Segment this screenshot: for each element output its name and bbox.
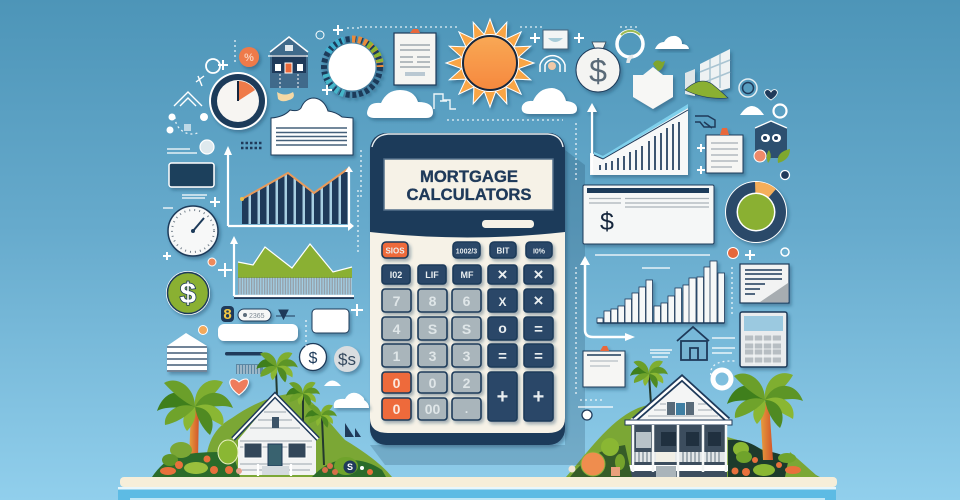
icon: dollar coin green: $ — [180, 278, 196, 310]
calculator screen — [384, 159, 553, 210]
keypad labels: 2 — [463, 375, 471, 391]
calculator bezel highlight — [372, 134, 563, 147]
icon: stacked layers house — [167, 333, 207, 372]
palm: big right — [727, 373, 803, 460]
icon: cloud top left — [367, 90, 433, 118]
keypad labels: MF — [460, 270, 474, 280]
card: dollar check — [583, 185, 714, 244]
keypad labels: 0 — [393, 375, 401, 391]
icon: money bag — [576, 42, 620, 92]
icon: colourful dial — [324, 39, 380, 95]
keypad labels: 7 — [393, 293, 401, 309]
palm: second small left — [286, 382, 320, 425]
icon: sun — [446, 19, 534, 107]
calculator screen: CALCULATORS — [406, 186, 532, 204]
keypad labels: . — [465, 402, 468, 416]
keypad labels: × — [498, 265, 508, 284]
beach and water base — [118, 477, 837, 500]
icon: triangle pin — [276, 310, 295, 319]
bushes: right of left cottage — [312, 457, 386, 477]
keypad labels — [385, 246, 546, 417]
keypad labels: × — [534, 265, 544, 284]
house: left cottage — [233, 395, 318, 476]
bushes: right hill fruit — [568, 438, 632, 477]
chart: bars with orange line — [224, 146, 354, 231]
calculator — [370, 133, 565, 445]
icon: dollar circle: $ — [309, 350, 318, 367]
icon: city building — [685, 49, 730, 98]
icon: yellow number — [221, 306, 234, 323]
palm: third small left — [305, 405, 337, 465]
keypad labels: 0 — [393, 401, 401, 417]
calculator screen: MORTGAGE — [420, 168, 518, 186]
icon: hexagon tag — [633, 60, 673, 109]
keypad labels: × — [534, 291, 544, 310]
keypad labels: = — [534, 321, 543, 338]
chart: green mountain area — [230, 236, 354, 298]
white rounded box — [312, 309, 349, 333]
icon: orange pin left 1 — [208, 258, 216, 266]
icon: clipboard right — [706, 128, 743, 173]
keypad labels: 1002/3 — [456, 248, 477, 256]
icon: small heart right — [765, 90, 777, 100]
keypad labels: = — [498, 348, 507, 365]
chart: rising area with bars — [587, 103, 688, 175]
icon: clipboard document top — [394, 29, 436, 85]
icon: orange percent circle: % — [244, 52, 254, 64]
card: dollar check: $ — [600, 208, 614, 236]
icon: money bag: $ — [589, 53, 607, 89]
keypad labels: 4 — [393, 321, 401, 337]
calculator slot — [482, 220, 534, 228]
keypad labels: S — [462, 321, 471, 337]
icon: small outlined house — [677, 327, 709, 360]
icon: dollar bag gray: $s — [338, 350, 356, 369]
keypad labels: 6 — [463, 293, 471, 309]
keypad labels: 0 — [429, 375, 437, 391]
keypad labels: I02 — [390, 270, 402, 280]
keypad — [382, 242, 553, 421]
keypad labels: LIF — [425, 270, 439, 280]
icon: cloud top right small — [655, 36, 689, 49]
icon: yellow number: 8 — [223, 306, 232, 323]
icon: ring lower right — [713, 370, 731, 388]
icon: circle badge — [739, 79, 757, 97]
calculator body — [370, 133, 565, 445]
keypad labels: SIOS — [385, 246, 405, 256]
keypad labels: 3 — [463, 348, 471, 364]
icon: orange percent circle — [239, 47, 259, 67]
hill: right green hill — [566, 405, 820, 477]
icon: navy house with eyes — [754, 121, 790, 163]
icon: text document — [740, 264, 789, 303]
icon: pie clock — [209, 72, 267, 130]
icon: cloud top right — [522, 88, 577, 114]
icon: location pin — [780, 170, 790, 180]
keypad labels: X — [498, 295, 507, 309]
keypad labels: I0% — [533, 248, 546, 256]
icon: mini calculator — [740, 312, 787, 367]
icon: small envelope — [543, 30, 568, 49]
keypad labels: o — [498, 320, 507, 336]
calculator shadow — [370, 150, 585, 465]
icon: sailboats — [345, 423, 361, 437]
white input pill — [218, 324, 298, 341]
small decorative marks — [163, 25, 789, 407]
bushes: right garden — [728, 440, 818, 477]
icon: gauge clock — [168, 206, 218, 256]
icon: heart — [230, 379, 248, 395]
bar slider — [225, 352, 263, 374]
chart: donut — [725, 181, 787, 243]
icon: orange pin left 2 — [198, 326, 208, 334]
palm: big left — [157, 380, 233, 460]
icon: orange dot right — [728, 248, 738, 258]
icon: dollar bag gray — [334, 346, 360, 372]
keypad labels: + — [533, 386, 544, 408]
icon: cloud right small — [740, 106, 764, 115]
pill with value: 2365 — [249, 313, 265, 320]
keypad labels: S — [428, 321, 437, 337]
arrow: curved axis — [580, 256, 635, 341]
keypad labels: 8 — [429, 293, 437, 309]
palm: small right — [630, 361, 668, 404]
icon: lens ring — [617, 31, 643, 63]
icon: clipboard lower right — [583, 346, 625, 387]
keypad labels: + — [497, 386, 508, 408]
icon: dollar circle — [300, 344, 326, 370]
icon: dollar coin green — [166, 271, 210, 315]
keypad labels: 3 — [429, 348, 437, 364]
keypad labels: = — [534, 348, 543, 365]
calculator cream face — [370, 232, 565, 433]
icon: glasses — [695, 116, 715, 128]
icon: cookie shape — [277, 92, 294, 101]
icon: small cloud lower left — [324, 380, 341, 386]
hill: left green hill — [205, 393, 392, 477]
icon: small house top — [268, 37, 308, 88]
house: right porch house — [625, 376, 732, 477]
palm: small behind left house — [256, 352, 298, 396]
icon: arch rainbow — [540, 56, 565, 72]
keypad labels: BIT — [497, 246, 510, 256]
keypad labels: 00 — [425, 401, 440, 417]
bushes: right of left cottage: S — [347, 462, 353, 472]
chart: white bars — [597, 261, 724, 323]
card: cloud lined — [271, 98, 353, 155]
keypad labels: 1 — [393, 348, 401, 364]
icon: small circle target — [582, 410, 592, 420]
bushes: left garden — [152, 440, 242, 477]
pill with value — [238, 309, 271, 321]
icon: building outline doodle — [434, 94, 456, 109]
icon: cloud lower left — [334, 393, 369, 408]
icon: ring right — [774, 104, 786, 118]
icon: dark rectangle tablet — [169, 163, 214, 187]
